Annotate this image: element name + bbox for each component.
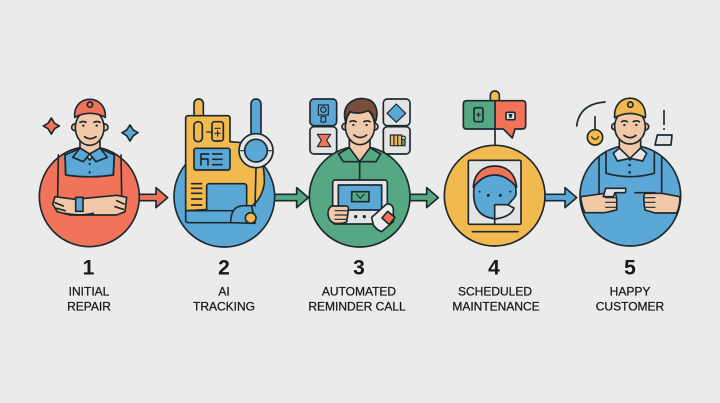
step 1 label: REPAIR: [67, 300, 111, 314]
step 4 label: MAINTENANCE: [452, 300, 540, 314]
icon tiles: [310, 99, 410, 154]
step 1 label: 1: [83, 256, 95, 280]
happy customer figure: [581, 98, 680, 213]
step 2 label: AI: [218, 284, 230, 298]
icon: blue sparkle: [122, 125, 138, 141]
step 2 label: 2: [218, 256, 230, 280]
chat bubbles: [463, 91, 526, 146]
panel: step 4 scheduled maintenance: [444, 91, 577, 246]
icon: red sparkle: [43, 118, 59, 134]
icon: alert note: [655, 111, 672, 145]
step 1 label: [67, 256, 111, 314]
person with tablet: [328, 98, 395, 232]
step 3 label: AUTOMATED: [322, 284, 396, 298]
step 4 label: 4: [488, 256, 500, 280]
tracking device: [186, 99, 273, 223]
arrow: step 3 to 4: [408, 188, 438, 208]
green circle: [309, 146, 410, 247]
panel: step 5 happy customer: [577, 98, 681, 246]
step 4 label: SCHEDULED: [458, 284, 532, 298]
icon: hanging smiley gauge: [577, 102, 605, 145]
step 3 label: 3: [353, 256, 365, 280]
panel: step 3 automated reminder call: [309, 98, 438, 247]
blue circle: [174, 146, 275, 247]
arrow: step 1 to 2: [137, 188, 168, 208]
step 3 label: [308, 256, 406, 314]
step 5 label: HAPPY: [610, 284, 650, 298]
arrow: step 4 to 5: [543, 188, 577, 208]
worker figure: [53, 99, 127, 215]
yellow circle: [444, 145, 545, 246]
step 5 label: 5: [624, 256, 636, 280]
step 4 label: [452, 256, 540, 314]
panel: step 1 initial repair: [39, 99, 168, 247]
step 1 label: INITIAL: [69, 284, 110, 298]
step 2 label: [193, 256, 255, 314]
step 5 label: [596, 256, 665, 314]
blue circle: [580, 145, 681, 246]
arrow: step 2 to 3: [273, 188, 308, 208]
step 5 label: CUSTOMER: [596, 300, 665, 314]
maintenance card with face: [468, 160, 521, 232]
panel: step 2 AI tracking: [174, 99, 308, 247]
step 2 label: TRACKING: [193, 300, 255, 314]
step 3 label: REMINDER CALL: [308, 300, 406, 314]
red circle: [39, 147, 139, 247]
